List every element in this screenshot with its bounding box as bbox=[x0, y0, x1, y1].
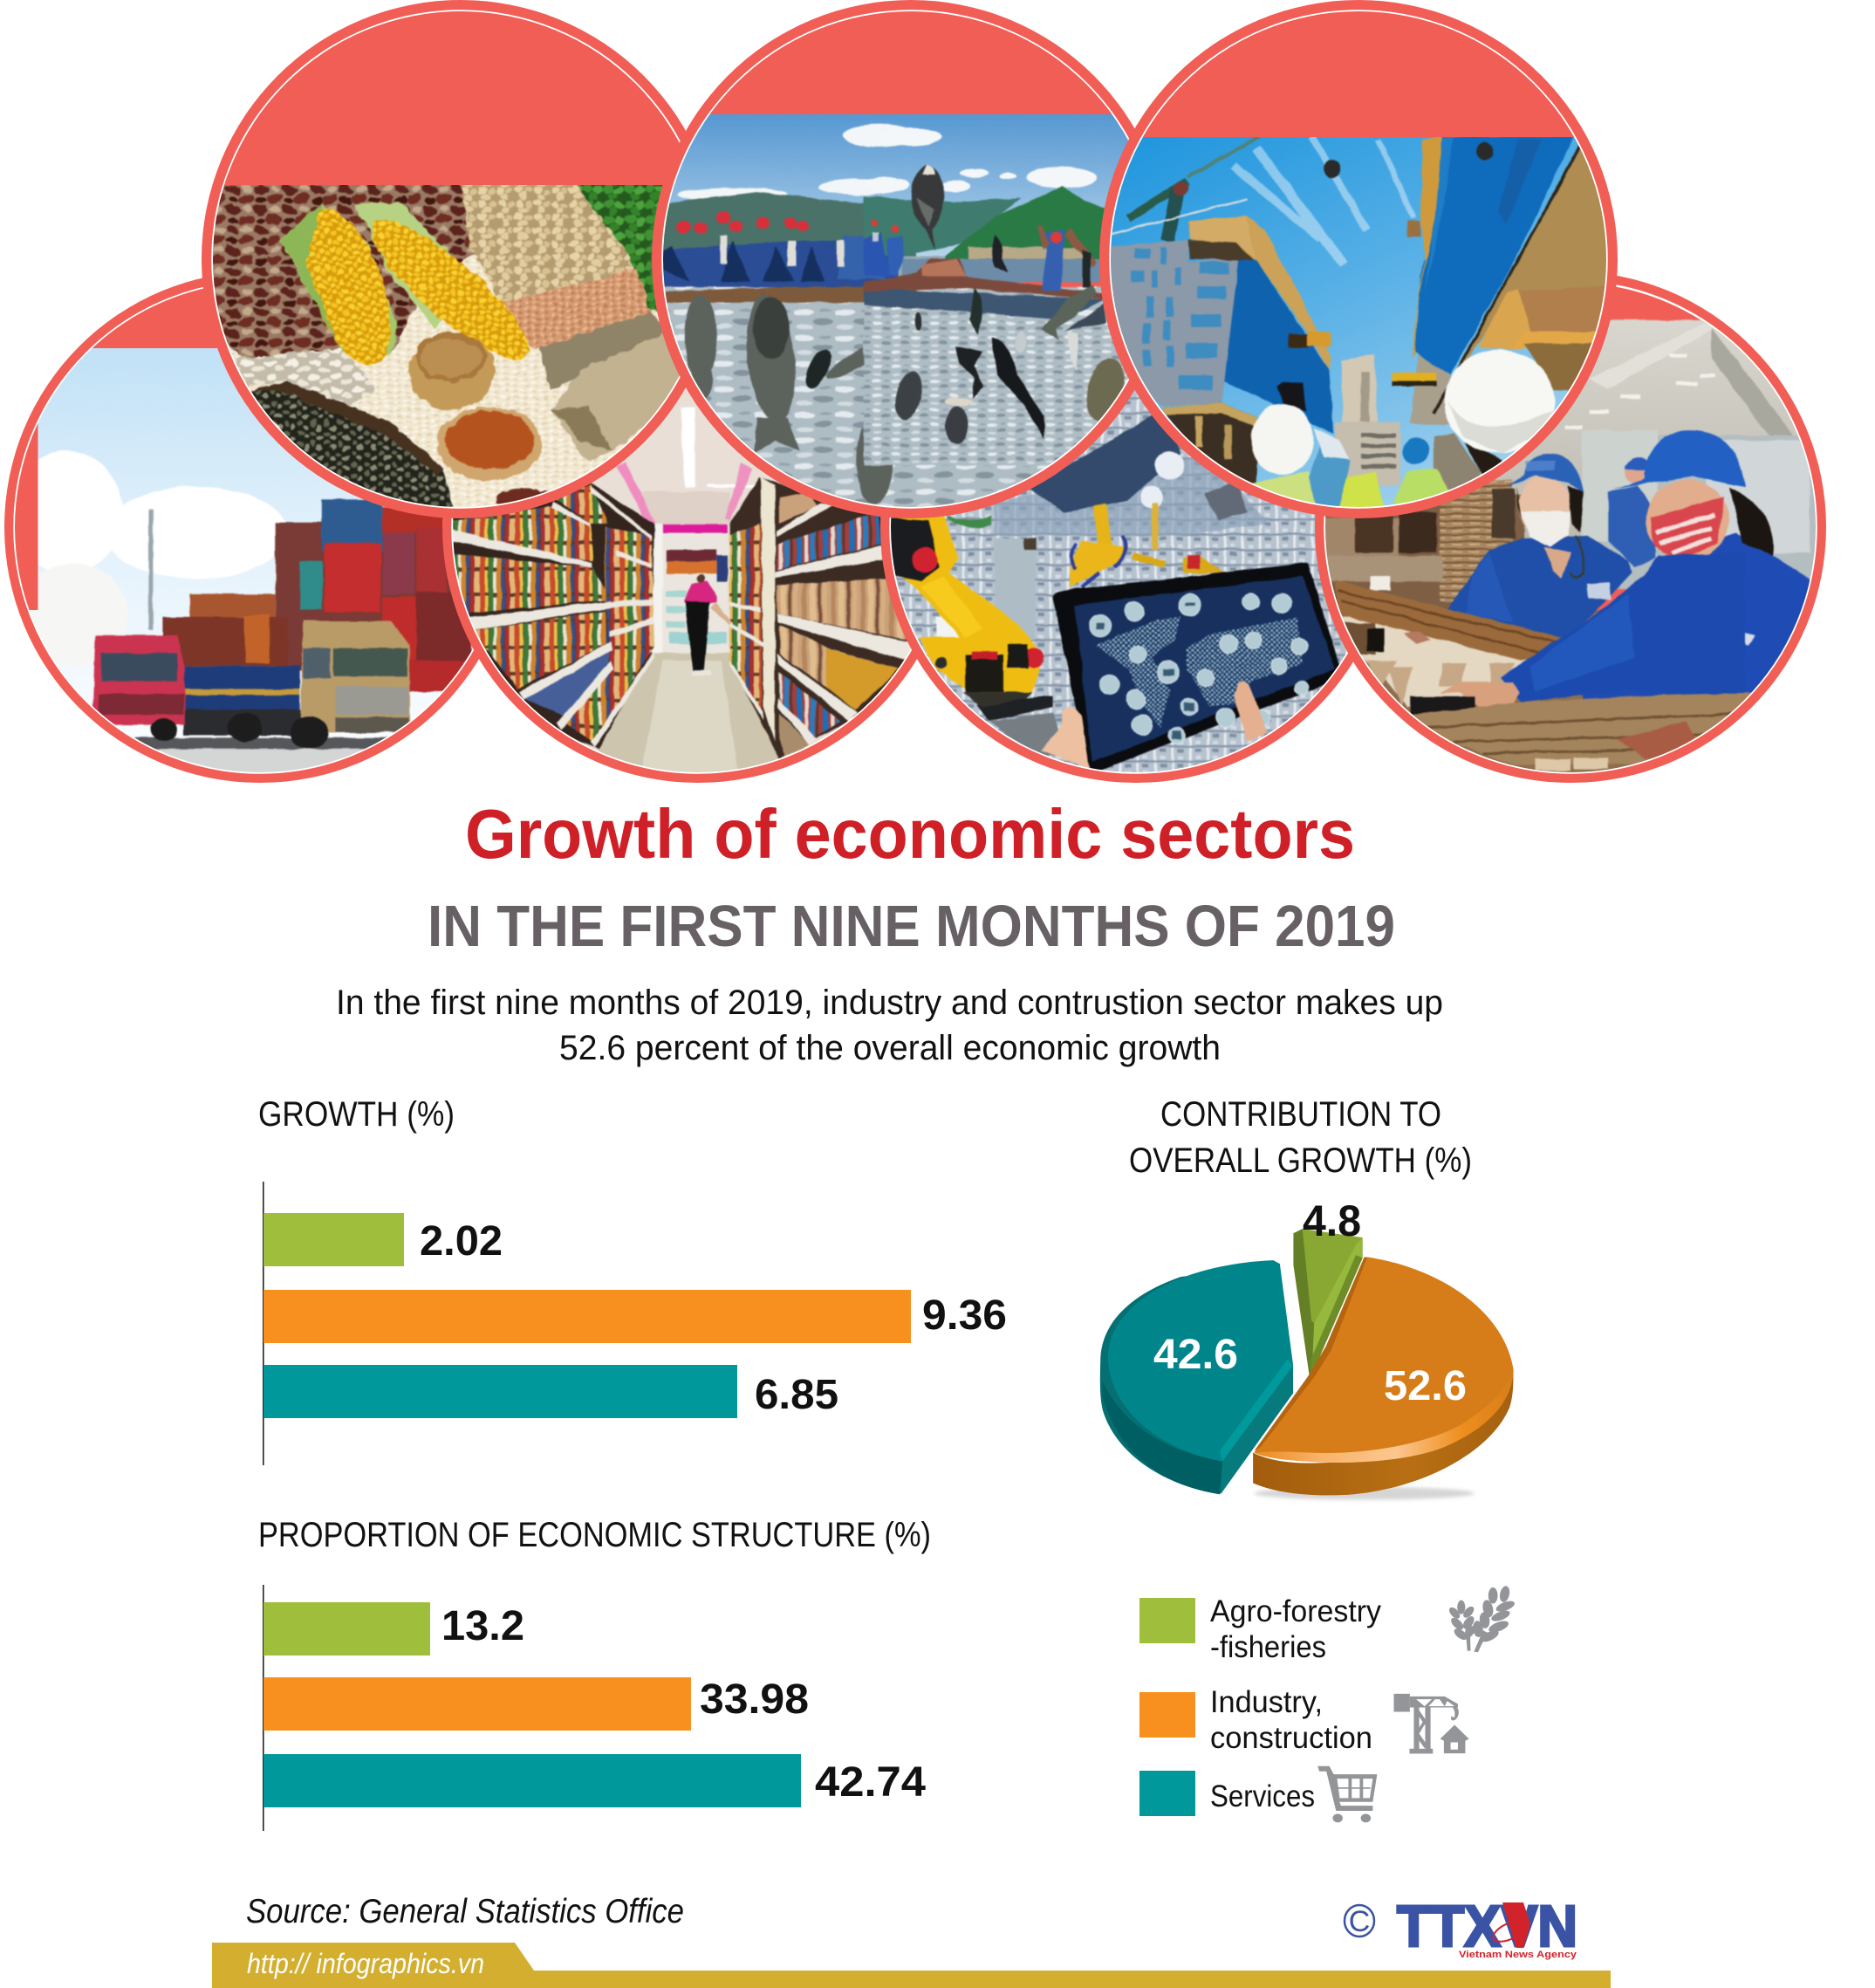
heading: proportion of economic structure: PROPORTION OF ECONOMIC STRUCTURE (%) bbox=[258, 1516, 931, 1554]
bar chart: growth bbox=[263, 1182, 1007, 1465]
intro text bbox=[336, 984, 1443, 1067]
pie label 42.6: 42.6 bbox=[1153, 1332, 1238, 1378]
slice: agro-forestry-fisheries bbox=[1293, 1229, 1363, 1377]
bar: services 6.85: 6.85 bbox=[755, 1372, 838, 1418]
3D pie chart: contribution to overall growth bbox=[1100, 1196, 1514, 1500]
intro text: 52.6 percent of the overall economic growth bbox=[559, 1029, 1221, 1067]
bar: industry, construction 33.98: 33.98 bbox=[700, 1676, 809, 1723]
pie label 52.6: 52.6 bbox=[1384, 1363, 1467, 1409]
bar: services 6.85 bbox=[263, 1365, 838, 1418]
slice: industry and construction bbox=[1253, 1257, 1514, 1495]
footer url: http:// infographics.vn bbox=[247, 1948, 484, 1979]
legend item: agro-forestry-fisheries: Agro-forestry bbox=[1210, 1594, 1381, 1628]
bar: industry, construction 9.36: 9.36 bbox=[922, 1292, 1007, 1339]
icon: wheat bbox=[1447, 1586, 1516, 1652]
bar: services 42.74 bbox=[263, 1754, 926, 1807]
heading: contribution to overall growth: CONTRIBUTION TO bbox=[1160, 1095, 1441, 1134]
heading: contribution to overall growth bbox=[1129, 1095, 1472, 1180]
legend item: services bbox=[1139, 1771, 1315, 1816]
photo circle: container trucks bbox=[4, 278, 479, 783]
title: Growth of economic sectors bbox=[465, 795, 1355, 873]
icon: shopping cart bbox=[1317, 1766, 1377, 1822]
legend item: industry, construction: Industry, bbox=[1210, 1685, 1323, 1719]
legend item: agro-forestry-fisheries: -fisheries bbox=[1210, 1630, 1326, 1664]
bar: agro-forestry-fisheries 2.02: 2.02 bbox=[420, 1218, 503, 1265]
footer band bbox=[212, 1943, 1611, 1988]
bar: industry, construction 33.98 bbox=[263, 1676, 809, 1731]
photo circle: grains and corn bbox=[202, 0, 686, 518]
logo: TTXVN Vietnam News Agency: Vietnam News Agency bbox=[1459, 1950, 1577, 1960]
legend item: industry, construction bbox=[1139, 1685, 1372, 1755]
photo circle: robot factory and tablet bbox=[880, 389, 1353, 783]
bar: services 42.74: 42.74 bbox=[815, 1759, 926, 1806]
bar: agro-forestry-fisheries 13.2: 13.2 bbox=[441, 1603, 524, 1649]
legend item: agro-forestry-fisheries bbox=[1139, 1594, 1381, 1664]
bar: agro-forestry-fisheries 13.2 bbox=[263, 1602, 524, 1656]
legend item: services: Services bbox=[1210, 1779, 1315, 1813]
logo: TTXVN Vietnam News Agency: C bbox=[1349, 1905, 1370, 1938]
bar chart: proportion of economic structure bbox=[263, 1585, 926, 1831]
slice: services bbox=[1100, 1260, 1293, 1494]
intro text: In the first nine months of 2019, industry and contrustion sector makes up bbox=[336, 984, 1443, 1022]
bar: agro-forestry-fisheries 2.02 bbox=[263, 1213, 503, 1266]
photo circle: fish farm bbox=[652, 0, 1134, 518]
heading: growth: GROWTH (%) bbox=[258, 1095, 455, 1134]
heading: contribution to overall growth: OVERALL GROWTH (%) bbox=[1129, 1141, 1472, 1180]
subtitle: IN THE FIRST NINE MONTHS OF 2019 bbox=[428, 894, 1395, 959]
pie label 4.8: 4.8 bbox=[1303, 1196, 1361, 1245]
legend bbox=[1139, 1586, 1516, 1822]
source note: Source: General Statistics Office bbox=[246, 1893, 684, 1930]
photo circle: supermarket aisle bbox=[442, 387, 917, 783]
icon: crane and house bbox=[1393, 1694, 1469, 1753]
legend item: industry, construction: construction bbox=[1210, 1721, 1372, 1755]
bar: industry, construction 9.36 bbox=[263, 1290, 1007, 1343]
photo circle: building construction bbox=[1099, 0, 1618, 518]
logo: TTXVN Vietnam News Agency: TTXVN bbox=[1397, 1894, 1577, 1959]
photo circle: workers with wood boards bbox=[1303, 271, 1846, 785]
